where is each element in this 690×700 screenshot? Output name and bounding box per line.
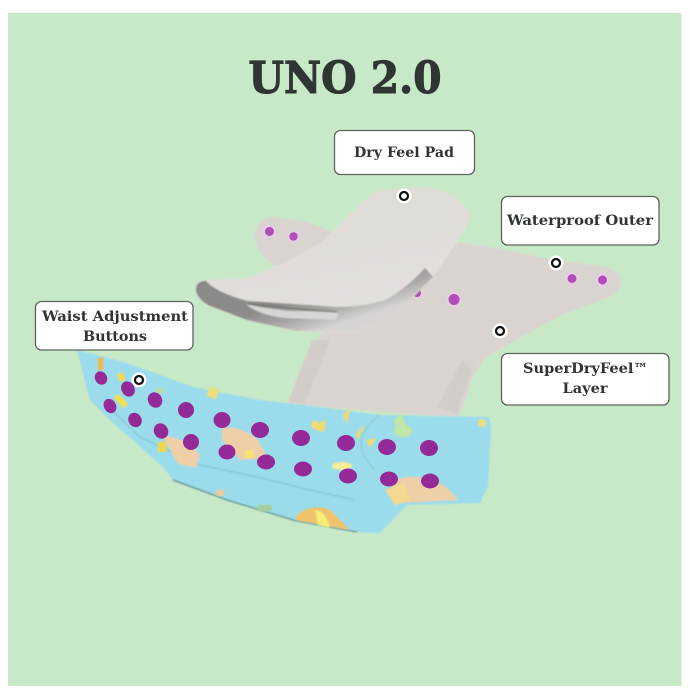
waist band: printed blue belt [77,350,491,533]
callout: Waist Adjustment Buttons [36,302,193,350]
back snap buttons [263,225,609,307]
dry feel pad [196,188,471,332]
title: UNO 2.0 [248,53,442,104]
belt crease and bottom edge [103,402,380,532]
callout: Waist Adjustment Buttons: Waist Adjustment [41,309,189,325]
belt adjustment buttons [92,369,439,488]
callout: SuperDryFeel Layer: Layer [562,381,608,397]
callout: Waist Adjustment Buttons: Buttons [83,329,147,345]
elastic strips [288,340,472,414]
pad underside fold [196,268,433,332]
callout: SuperDryFeel Layer: SuperDryFeel™ [523,361,648,377]
marker: waist buttons [132,372,146,388]
callout: Waterproof Outer [502,196,659,245]
callout: SuperDryFeel Layer [502,354,669,405]
callout: Waterproof Outer: Waterproof Outer [506,213,654,229]
callout: Dry Feel Pad: Dry Feel Pad [354,145,455,161]
marker: superdryfeel layer [492,324,508,338]
marker: waterproof outer [548,256,564,270]
callout: Dry Feel Pad [334,130,474,174]
diaper back layer: waterproof outer [254,217,621,418]
marker: pad [396,188,412,204]
belt print shapes [98,358,486,530]
